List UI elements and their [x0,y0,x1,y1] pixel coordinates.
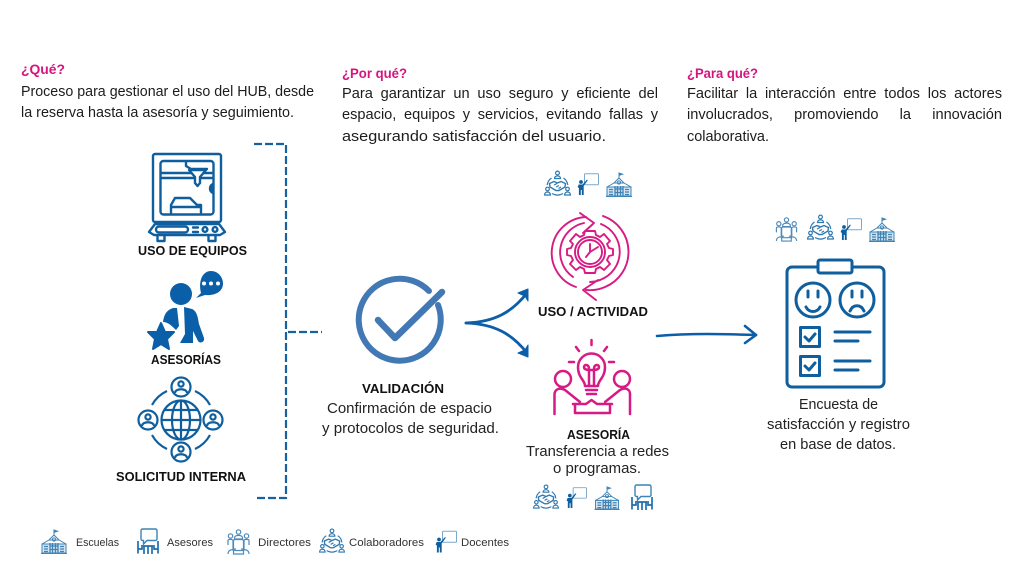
text line: por qué closing: asegurando satisfacción del usuario. [342,129,606,145]
text line: para qué 2: involucrados, promoviendo la innovación [687,107,1002,123]
legend: docentes: Docentes [461,537,509,549]
icon: validation check [359,279,442,361]
arrow: to survey [657,326,756,343]
label: VALIDACIÓN: VALIDACIÓN [362,381,444,396]
icons: row above uso [545,171,632,196]
text line: para qué 1: Facilitar la interacción entre todos los actores [687,86,1002,102]
heading: ¿Para qué?: ¿Para qué? [687,65,758,81]
legend: colaboradores [320,529,424,552]
text block: asesoría [526,444,669,477]
text block: encuesta: Encuesta de [799,397,878,413]
heading: ¿Por qué?: ¿Por qué? [342,65,407,81]
text block: asesoría: o programas. [553,461,641,477]
icon: meeting with lightbulb [554,340,630,414]
label: SOLICITUD INTERNA: SOLICITUD INTERNA [116,469,246,484]
text block: qué: la reserva hasta la asesoría y seguimiento. [21,105,294,121]
text line: por qué 2: espacio, equipos y servicios, evitando fallas y [342,107,658,123]
legend: escuelas [41,530,119,554]
bracket: dashed connector [254,144,322,498]
text block: validación: Confirmación de espacio [327,401,492,417]
label: USO / ACTIVIDAD: USO / ACTIVIDAD [538,304,648,319]
legend: directores: Directores [258,537,311,549]
legend: docentes [436,531,509,552]
legend [41,529,509,554]
text block: validación: y protocolos de seguridad. [322,421,499,437]
heading: ¿Qué?: ¿Qué? [21,61,65,77]
icon: 3D printer [149,154,225,241]
text block: qué [21,84,314,121]
icon: gear clock cycle [552,213,628,300]
text block: encuesta: satisfacción y registro [767,417,910,433]
arrow: fork to uso and asesoría [466,289,528,357]
icon: asesorías person [148,271,223,349]
icon: globe with people [138,378,222,462]
legend: escuelas: Escuelas [76,537,119,549]
label: ASESORÍAS: ASESORÍAS [151,352,221,367]
legend: colaboradores: Colaboradores [349,537,424,549]
legend: asesores [138,529,213,554]
icon: survey clipboard [787,260,884,387]
icons: row above survey [776,215,895,242]
icons: row below asesoría [534,485,652,510]
label: USO DE EQUIPOS: USO DE EQUIPOS [138,243,247,258]
label: ASESORÍA: ASESORÍA [567,427,630,442]
text block: encuesta [767,397,910,453]
legend: directores [228,530,311,554]
text line: por qué 1: Para garantizar un uso seguro y eficiente del [342,86,658,102]
text block: asesoría: Transferencia a redes [526,444,669,460]
text block: qué: Proceso para gestionar el uso del HUB, desde [21,84,314,100]
text block: validación [322,401,499,437]
legend: asesores: Asesores [167,537,213,549]
text block: encuesta: en base de datos. [780,437,896,453]
text line: para qué closing: colaborativa. [687,129,769,145]
